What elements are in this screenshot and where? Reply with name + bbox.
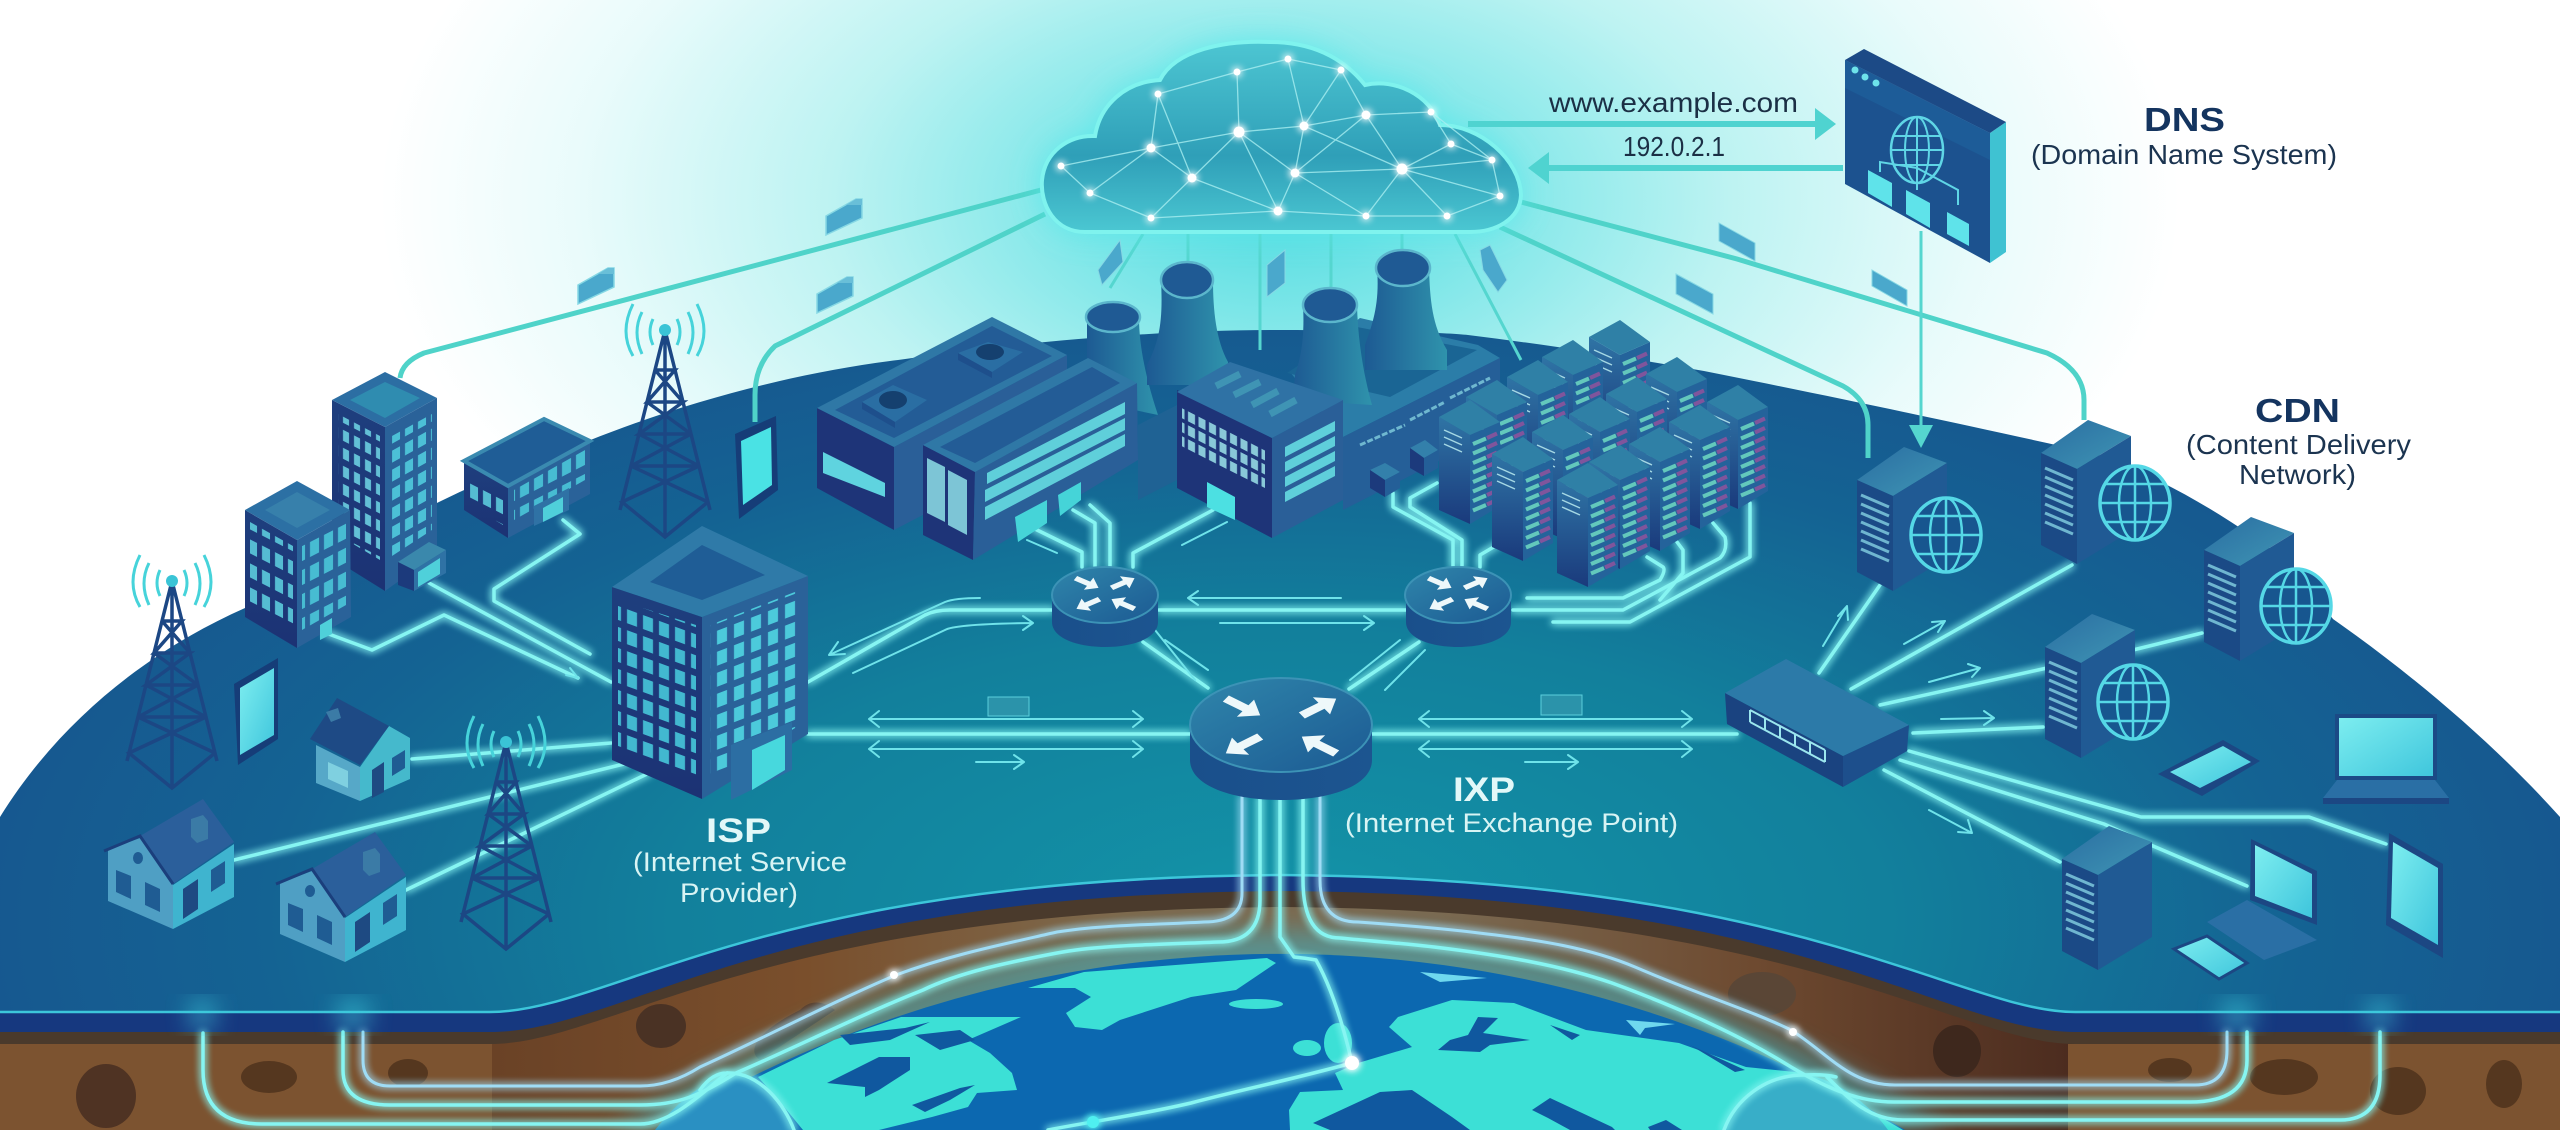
- cloud with network mesh: [1042, 42, 1521, 232]
- cloud mesh nodes: [1058, 56, 1504, 222]
- cable: ISP to router west: [808, 610, 1053, 682]
- cloud to site links: [400, 190, 2084, 458]
- house 1: [310, 698, 410, 801]
- DNS vertical link with arrow: [1909, 231, 1933, 448]
- dark soil crust under platform: [0, 875, 2560, 1044]
- platform side band: [0, 875, 2560, 1032]
- CDN server 2: [2041, 420, 2170, 564]
- tablet: [2158, 740, 2260, 796]
- cable: router east to IXP: [1349, 642, 1419, 689]
- label: CDN: [2186, 392, 2411, 490]
- ocean: [655, 954, 1905, 1130]
- entrance annex: [398, 542, 446, 591]
- continent: eurasia: [1289, 1000, 1903, 1130]
- label: IXP: IXP: [1453, 771, 1515, 809]
- continent: greenland: [1028, 958, 1276, 1030]
- router side arrows: [829, 591, 1374, 673]
- router: IXP main: [1190, 678, 1372, 800]
- cable: router west to IXP: [1143, 642, 1208, 688]
- label: ISP: [633, 812, 847, 908]
- label: IXP: (Internet Exchange Point): [1345, 808, 1678, 838]
- label: CDN: CDN: [2255, 392, 2340, 429]
- router: west: [1052, 567, 1158, 647]
- thin flow arrows on platform: [566, 522, 1994, 833]
- cloud body: [1042, 42, 1521, 232]
- cable: ISP to IXP: [808, 732, 1190, 736]
- globe: earth with continents: [612, 931, 1948, 1130]
- tower: front: [461, 716, 551, 949]
- router: east: [1405, 567, 1511, 647]
- arrows between cloud and DNS: [1468, 108, 1843, 184]
- server rack farm: [1439, 320, 1768, 587]
- cable: switch to lower devices: [1909, 751, 2386, 844]
- data centre building front: [923, 358, 1138, 560]
- glowing junction points: [890, 971, 1797, 1128]
- network switch: [1725, 659, 1909, 787]
- label: DNS: [2031, 101, 2337, 170]
- cable: factory feeds: [1033, 528, 1082, 567]
- arc highlight right: [1724, 1075, 1888, 1130]
- arc highlight left: [655, 1075, 794, 1130]
- hudson bay and arctic channels: [827, 1022, 975, 1112]
- label: www.example.com: www.example.com: [1548, 87, 1798, 118]
- CDN server 1: [1857, 447, 1981, 591]
- label: DNS: (Domain Name System): [2031, 139, 2337, 170]
- house 3: [276, 832, 406, 962]
- phone left: [234, 658, 278, 765]
- label: DNS: DNS: [2144, 101, 2225, 138]
- data centre building rear: [817, 317, 1067, 530]
- cable glow at platform edge: [190, 1000, 2392, 1030]
- continent: iceland: [1229, 999, 1283, 1009]
- label: ISP: Provider): [680, 878, 798, 908]
- laptop upper: [2323, 716, 2449, 804]
- factory building right: [1177, 362, 1343, 538]
- link wall between buildings: [1138, 405, 1177, 500]
- continent: north america: [758, 1017, 1021, 1130]
- platform edge highlight: [0, 875, 2560, 1012]
- phone on hill: [735, 416, 778, 519]
- rooftop fan unit: [862, 385, 927, 428]
- arrows toward servers: [1823, 606, 1994, 833]
- laptop lower: [2207, 839, 2317, 960]
- label: IXP: [1345, 771, 1678, 838]
- cable: ISP access links: [412, 743, 611, 759]
- cable: switch to CDN servers: [1819, 585, 1880, 673]
- label: ISP: ISP: [706, 812, 771, 850]
- tower: left: [127, 555, 217, 788]
- building: low office back left: [245, 481, 351, 648]
- server lower: [2062, 826, 2152, 970]
- power plant base: [1287, 318, 1500, 437]
- arctic ice streaks: [1420, 972, 1675, 1035]
- tower: central: [620, 304, 710, 537]
- label: ISP: (Internet Service: [633, 847, 847, 877]
- cabinet boxes: [1370, 440, 1438, 497]
- cables to the globe and through the soil: [203, 796, 2380, 1130]
- data packet east: [1541, 695, 1582, 715]
- label: 192.0.2.1: 192.0.2.1: [1623, 131, 1725, 162]
- ISP office building: [612, 526, 808, 800]
- house 2: [104, 799, 234, 929]
- tablet right: [2386, 833, 2443, 958]
- platform network cables: [234, 483, 2386, 890]
- soil layer: [0, 870, 2560, 1130]
- rooftop fan unit: [958, 342, 1023, 378]
- double arrows: IXP to switch: [1419, 711, 1692, 769]
- cooling towers: [1086, 250, 1447, 415]
- phone: [2174, 936, 2247, 979]
- factory low wing: [1343, 358, 1500, 510]
- cable: router east to racks: [1513, 523, 1726, 610]
- platform: dome surface: [0, 330, 2560, 1012]
- data packet west: [988, 697, 1029, 716]
- building: small office: [464, 419, 590, 538]
- double arrows: ISP to IXP: [869, 711, 1143, 769]
- building: tall office back left: [332, 372, 446, 591]
- cable: routers link: [1159, 608, 1407, 612]
- continent: britain and ireland: [1293, 1023, 1352, 1063]
- folder icons in transit: [578, 199, 1907, 314]
- inland seas: [1313, 1017, 1745, 1130]
- CDN server 4: [2045, 614, 2168, 758]
- CDN server 3: [2204, 517, 2331, 661]
- label: CDN: Network): [2239, 459, 2356, 490]
- label: CDN: (Content Delivery: [2186, 429, 2411, 460]
- cable: IXP to switch: [1372, 732, 1737, 736]
- DNS panel icon: [1845, 49, 2006, 263]
- cloud mesh lines: [1061, 59, 1500, 218]
